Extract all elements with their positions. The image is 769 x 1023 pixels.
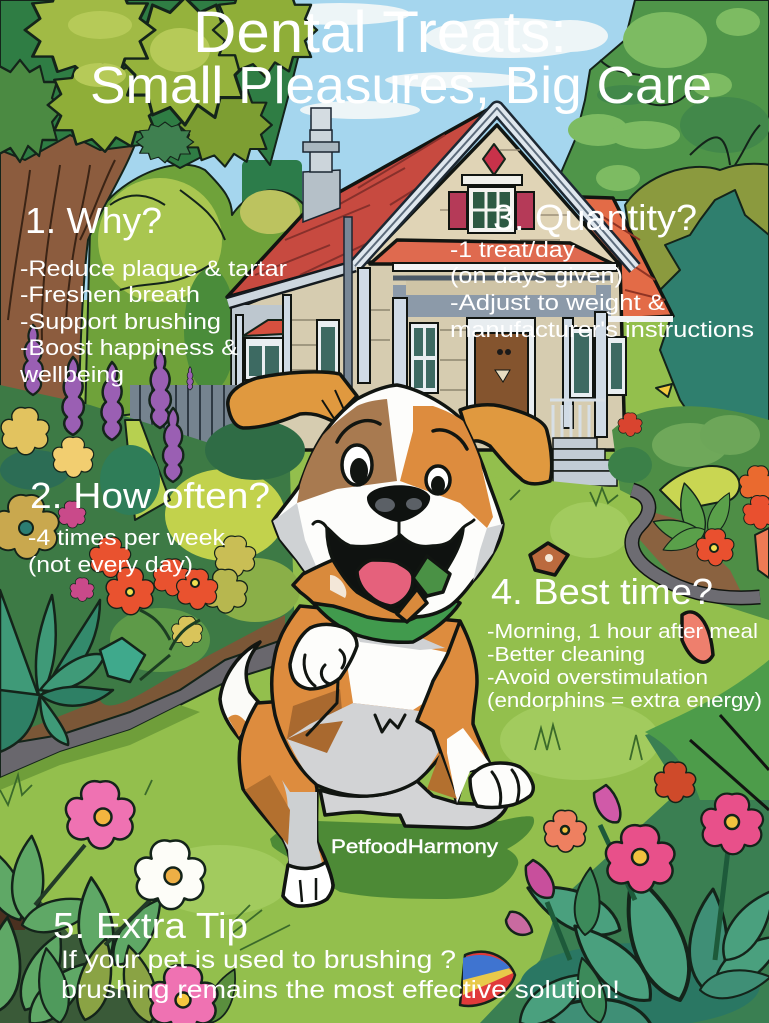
white daisy [135, 840, 205, 909]
background bushes behind house [85, 160, 310, 420]
left ear [228, 372, 357, 428]
body [272, 606, 476, 796]
soil band [0, 615, 285, 770]
siding lines [290, 310, 468, 390]
red flowers [90, 537, 218, 615]
back left leg [239, 700, 333, 906]
pebble [530, 543, 568, 575]
light bush [165, 469, 285, 561]
raised paw [290, 624, 357, 689]
bottom right foliage [460, 660, 769, 1023]
salmon tulip [682, 612, 713, 662]
porch railing [550, 400, 605, 438]
tail [220, 642, 260, 739]
tongue [357, 560, 413, 606]
section 3: quantity: -1 treat/day [450, 237, 576, 262]
section 2: how often: (not every day) [28, 552, 193, 577]
left tree canopy [0, 0, 317, 168]
porch columns [236, 268, 607, 437]
head brown left [297, 399, 397, 503]
section 5: extra tip: brushing remains the most effective solution! [61, 976, 620, 1004]
title: Small Pleasures, Big Care [90, 57, 712, 115]
front right leg [417, 621, 490, 803]
section 3: quantity: manufacturer's instructions [450, 317, 754, 342]
dog [220, 372, 552, 906]
smile line [313, 520, 474, 535]
section 4: best time [487, 571, 762, 712]
lawn [0, 470, 769, 1023]
section 1: why: -Support brushing [20, 309, 221, 334]
gable window [449, 175, 534, 233]
section 4: best time: -Better cleaning [487, 643, 645, 666]
roof left [227, 110, 487, 297]
left flower bed [0, 325, 305, 790]
leaves beneath [210, 558, 300, 622]
section 1: why: -Reduce plaque & tartar [20, 256, 288, 281]
gable diamond [483, 144, 505, 175]
title [90, 0, 712, 115]
section 1: why [19, 200, 288, 387]
grey fence [130, 385, 240, 455]
porch ceiling [393, 285, 611, 317]
dog ground shadow [270, 816, 534, 899]
left porch wing [232, 305, 290, 400]
sky [0, 0, 769, 300]
teal small flower [100, 638, 145, 682]
section 1: why: -Boost happiness & [20, 335, 238, 360]
olive hedge right [625, 164, 769, 300]
dental treat [397, 556, 450, 622]
teal fern [0, 590, 113, 752]
lavender [24, 325, 193, 482]
porch steps [553, 438, 617, 486]
brows [337, 421, 467, 449]
chimney [303, 108, 340, 222]
yellow flowers [0, 408, 256, 647]
pink flower [66, 781, 134, 848]
mouth [327, 528, 463, 610]
right eye [426, 466, 450, 494]
section 1: why: 1. Why? [25, 200, 162, 241]
section 5: extra tip: 5. Extra Tip [53, 905, 248, 946]
downpipe [344, 217, 352, 387]
left eye [342, 445, 372, 485]
bed leaves [650, 481, 739, 556]
tulips [506, 785, 620, 935]
section 1: why: -Freshen breath [20, 282, 200, 307]
nose [367, 485, 430, 522]
section 4: best time: 4. Best time? [491, 571, 713, 612]
section 4: best time: -Morning, 1 hour after meal [487, 620, 758, 643]
brand name: PetfoodHarmony [331, 837, 499, 858]
left tree trunk [0, 130, 140, 440]
door [467, 318, 535, 428]
orange bandana knot [293, 560, 407, 621]
section 3: quantity: -Adjust to weight & [450, 290, 665, 315]
right ear [460, 405, 552, 484]
right rear foot [320, 781, 507, 828]
small bay roof [243, 320, 283, 336]
bed flowers [618, 413, 769, 566]
brown patch [287, 689, 343, 753]
gable trim [355, 108, 635, 268]
stone border [0, 640, 282, 778]
dark leaf bush by ear [205, 420, 305, 480]
porch roof [370, 240, 613, 264]
section 2: how often: -4 times per week [28, 525, 226, 550]
fascia [228, 266, 355, 303]
stone border right [632, 490, 760, 598]
section 4: best time: -Avoid overstimulation [487, 666, 708, 689]
white chest [345, 636, 450, 710]
gable wall [365, 125, 620, 265]
section 1: why: wellbeing [19, 362, 124, 387]
grey belly [287, 703, 440, 796]
title: Dental Treats: [193, 0, 567, 65]
head [273, 385, 503, 617]
red flowers [655, 762, 696, 802]
section 5: extra tip: If your pet is used to brushing ? [61, 946, 456, 974]
section 3: quantity: 3. Quantity? [493, 197, 697, 238]
bottom left foliage [0, 781, 247, 1023]
section 2: how often: 2. How often? [30, 475, 270, 516]
section 4: best time: (endorphins = extra energy) [487, 689, 762, 712]
section 2: how often [28, 475, 270, 577]
grass shadow under stones [0, 705, 200, 790]
right tree canopy [560, 0, 769, 200]
evergreen bush right [660, 190, 769, 430]
section 3: quantity [450, 197, 754, 342]
house [227, 108, 673, 486]
green collar [310, 596, 460, 642]
cheek fur grey [273, 503, 322, 580]
house wall [232, 262, 625, 450]
bowl [460, 952, 515, 1006]
right orange roof wing behind [582, 197, 673, 320]
front right paw [470, 763, 533, 808]
grass tufts [0, 488, 642, 950]
section 3: quantity: (on days given) [450, 263, 623, 288]
pink flower bottom [149, 965, 217, 1023]
windows [245, 320, 626, 398]
lawn tone patches [150, 502, 660, 915]
right garden bed [608, 384, 769, 662]
pink flowers [606, 825, 674, 892]
clouds [270, 3, 608, 119]
head orange right [400, 406, 493, 528]
section 5: extra tip [53, 905, 620, 1004]
